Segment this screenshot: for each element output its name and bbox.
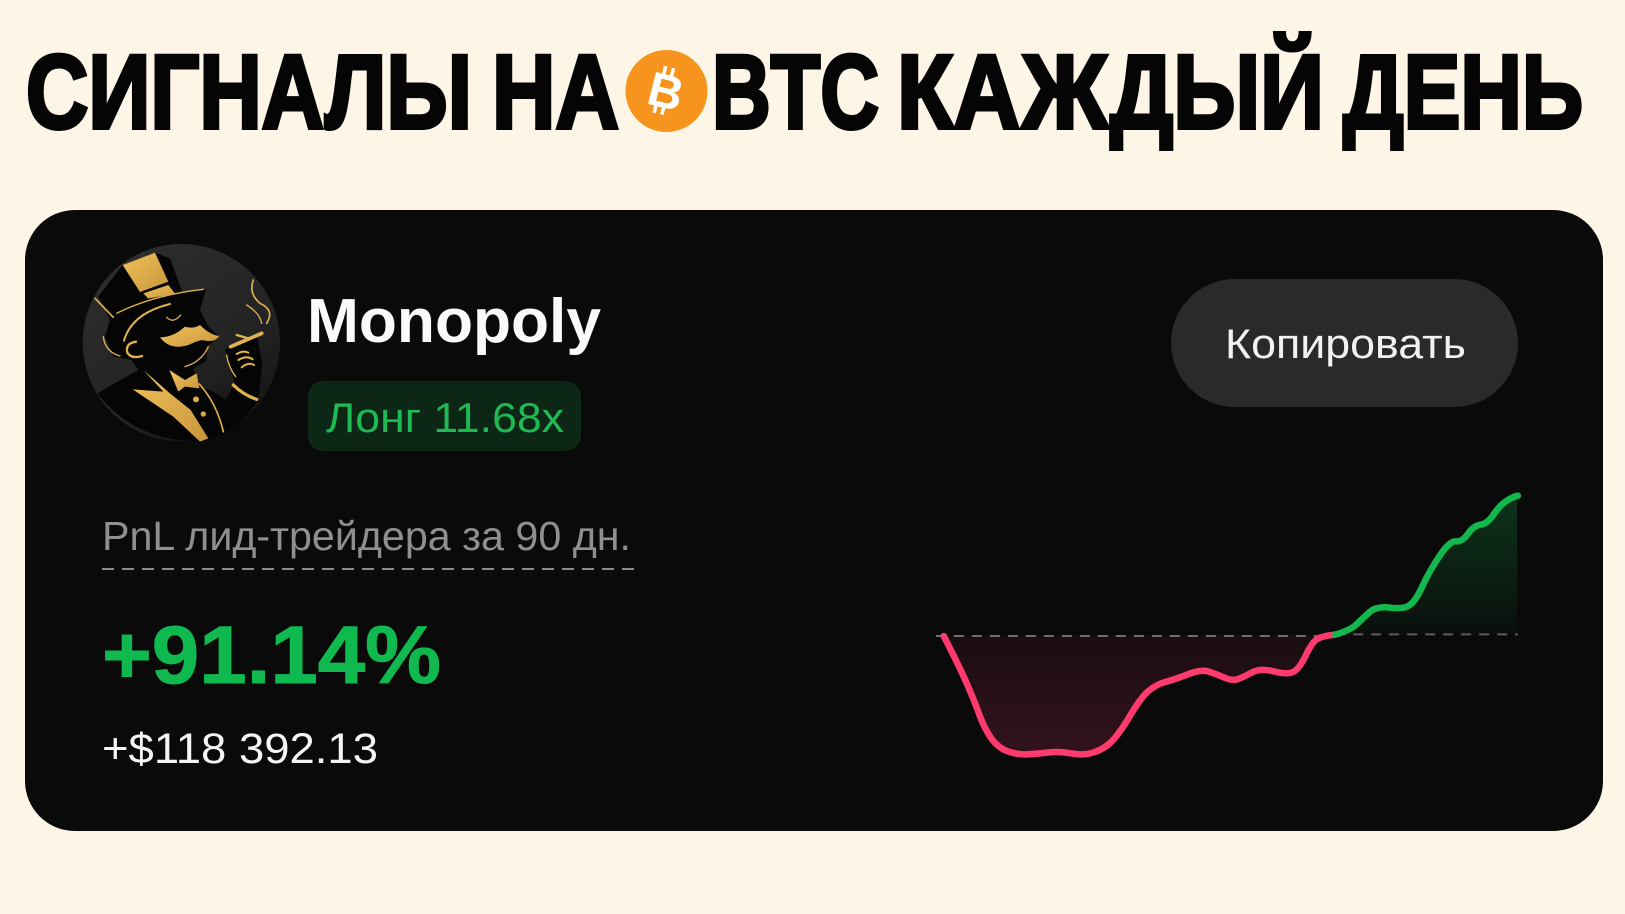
PnL percent: +91.14% <box>102 610 441 701</box>
title: НА <box>492 34 619 151</box>
title: Ж <box>1021 34 1109 151</box>
badge: long leverage: Лонг 11.68x <box>326 394 564 441</box>
chart line: loss <box>944 635 1335 754</box>
chart area: profit <box>1335 496 1517 635</box>
badge: long leverage <box>308 381 581 451</box>
panel: trader card <box>25 210 1603 831</box>
icon: bitcoin coin: B <box>642 63 689 122</box>
PnL amount: +$118 392.13 <box>102 725 378 773</box>
icon: monopoly avatar <box>83 244 280 442</box>
title: КА <box>897 34 1020 151</box>
button: copy <box>1171 279 1518 407</box>
title: ДЫЙ <box>1110 32 1324 151</box>
button: copy: Копировать <box>1225 320 1466 367</box>
PnL label: PnL лид-трейдера за 90 дн. <box>102 513 631 559</box>
title: BTC <box>712 34 879 151</box>
icon: bitcoin coin <box>626 50 708 132</box>
chart area: loss <box>944 635 1335 754</box>
chart line: profit <box>1335 496 1518 635</box>
title: СИГНА <box>26 34 324 151</box>
trader name: Monopoly <box>307 287 602 356</box>
title: ЛЫ <box>325 34 472 151</box>
zero line <box>936 635 1335 637</box>
title <box>26 32 1583 151</box>
line chart <box>936 496 1518 754</box>
